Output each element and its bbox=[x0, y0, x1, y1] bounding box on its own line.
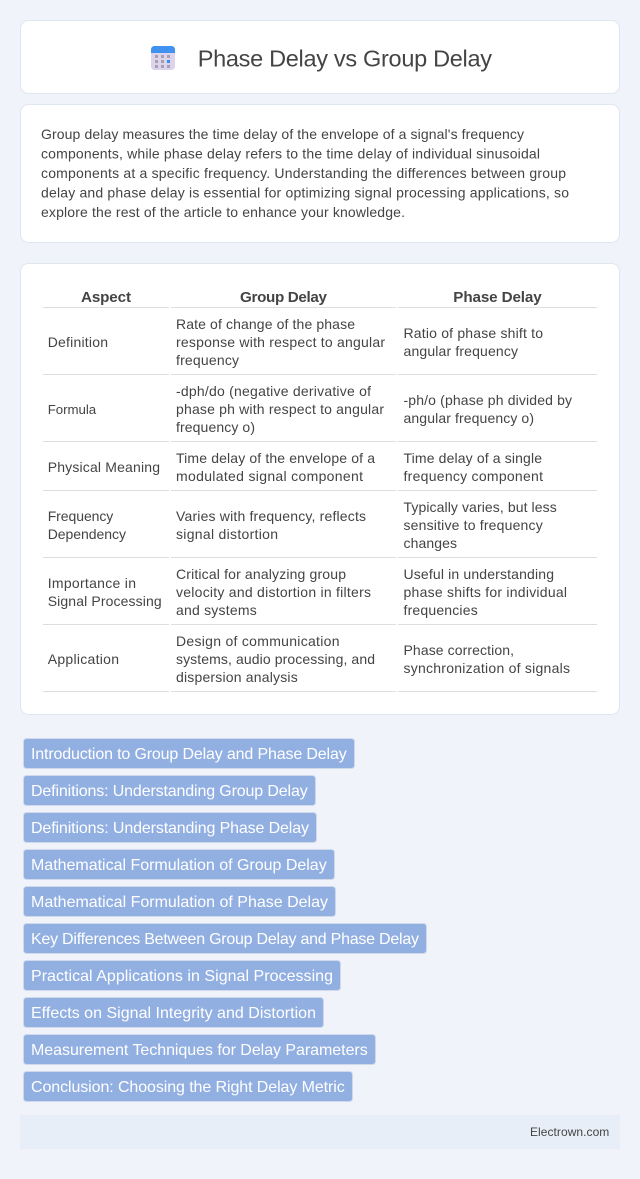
footer bbox=[20, 1115, 620, 1149]
row: importance in signal processing: velocity and distortion in filters bbox=[176, 584, 371, 600]
link: practical applications: Practical Applications in Signal Processing bbox=[31, 968, 333, 985]
intro paragraph: explore the rest of the article to enhance your knowledge. bbox=[41, 204, 405, 220]
link: measurement techniques: Measurement Techniques for Delay Parameters bbox=[31, 1042, 368, 1059]
link: key differences: Key Differences Between Group Delay and Phase Delay bbox=[31, 931, 419, 948]
intro paragraph: components, while phase delay refers to the time delay of individual sinusoidal bbox=[41, 146, 540, 162]
row: definition: Rate of change of the phase bbox=[176, 316, 355, 332]
link: effects: Effects on Signal Integrity and Distortion bbox=[31, 1005, 316, 1022]
row: formula: -ph/o (phase ph divided by bbox=[404, 392, 572, 408]
intro paragraph: delay and phase delay is essential for optimizing signal processing applications, so bbox=[41, 184, 569, 200]
row: application: Phase correction, bbox=[404, 642, 514, 658]
row: frequency dependency: signal distortion bbox=[176, 526, 278, 542]
row: frequency dependency: Dependency bbox=[48, 526, 126, 542]
row: frequency dependency: Varies with frequency, reflects bbox=[176, 508, 366, 524]
link: definitions group delay bbox=[24, 776, 316, 806]
row: frequency dependency: Frequency bbox=[48, 508, 113, 524]
link: conclusion bbox=[24, 1072, 352, 1102]
row: importance in signal processing: Importance in bbox=[48, 575, 136, 591]
row: physical meaning: Time delay of a single bbox=[404, 450, 542, 466]
link: effects bbox=[24, 998, 324, 1028]
row: importance in signal processing: Critical for analyzing group bbox=[176, 566, 346, 582]
row: importance in signal processing bbox=[48, 566, 567, 618]
link: definitions phase delay: Definitions: Understanding Phase Delay bbox=[31, 820, 309, 837]
row: importance in signal processing: frequencies bbox=[404, 602, 478, 618]
row: application: Application bbox=[48, 651, 119, 667]
row: frequency dependency: sensitive to frequency bbox=[404, 517, 543, 533]
panel: introduction bbox=[20, 104, 620, 242]
row: definition: angular frequency bbox=[404, 343, 518, 359]
link: key differences bbox=[24, 924, 426, 954]
row: application bbox=[48, 633, 570, 685]
link: formulation phase delay bbox=[24, 886, 336, 916]
row: physical meaning: Physical Meaning bbox=[48, 459, 160, 475]
link: measurement techniques bbox=[24, 1034, 376, 1064]
row: application: synchronization of signals bbox=[404, 660, 570, 676]
link: formulation group delay: Mathematical Formulation of Group Delay bbox=[31, 857, 327, 874]
row: importance in signal processing: and systems bbox=[176, 602, 257, 618]
table header bbox=[81, 289, 542, 306]
row: application: Design of communication bbox=[176, 633, 340, 649]
row: frequency dependency bbox=[48, 499, 557, 551]
icon: calendar bbox=[151, 46, 175, 70]
intro paragraph: components at a specific frequency. Understanding the differences between group bbox=[41, 165, 566, 181]
row: application: systems, audio processing, and bbox=[176, 651, 375, 667]
panel: comparison table bbox=[20, 264, 620, 714]
link: conclusion: Conclusion: Choosing the Right Delay Metric bbox=[31, 1079, 345, 1096]
intro paragraph: Group delay measures the time delay of the envelope of a signal's frequency bbox=[41, 126, 524, 142]
row: physical meaning: Time delay of the envelope of a bbox=[176, 450, 375, 466]
row: application: dispersion analysis bbox=[176, 669, 298, 685]
row: formula: -dph/do (negative derivative of bbox=[176, 383, 371, 399]
link: introduction: Introduction to Group Delay and Phase Delay bbox=[31, 746, 347, 763]
row: formula: phase ph with respect to angular bbox=[176, 401, 384, 417]
intro paragraph bbox=[41, 126, 569, 220]
row: physical meaning: modulated signal component bbox=[176, 468, 363, 484]
row: physical meaning: frequency component bbox=[404, 468, 543, 484]
row: definition bbox=[48, 316, 543, 368]
row: formula bbox=[48, 383, 572, 435]
title card bbox=[20, 20, 620, 94]
row: importance in signal processing: phase shifts for individual bbox=[404, 584, 567, 600]
table of contents bbox=[24, 738, 426, 1102]
link: practical applications bbox=[24, 960, 340, 990]
row: definition: Ratio of phase shift to bbox=[404, 325, 543, 341]
row: importance in signal processing: Useful in understanding bbox=[404, 566, 554, 582]
heading: Phase Delay vs Group Delay bbox=[198, 46, 492, 72]
row: frequency dependency: changes bbox=[404, 535, 457, 551]
link: introduction bbox=[24, 738, 354, 768]
row: definition: Definition bbox=[48, 334, 108, 350]
row: importance in signal processing: Signal Processing bbox=[48, 593, 162, 609]
footer: Electrown.com bbox=[530, 1125, 609, 1139]
row: definition: frequency bbox=[176, 352, 239, 368]
table header: Group Delay bbox=[240, 289, 328, 306]
row: formula: frequency o) bbox=[176, 419, 255, 435]
link: formulation phase delay: Mathematical Formulation of Phase Delay bbox=[31, 894, 328, 911]
row: definition: response with respect to angular bbox=[176, 334, 385, 350]
table header: Aspect bbox=[81, 289, 131, 306]
row: frequency dependency: Typically varies, but less bbox=[404, 499, 557, 515]
row: formula: Formula bbox=[48, 402, 97, 417]
row: physical meaning bbox=[48, 450, 543, 484]
row: formula: angular frequency o) bbox=[404, 410, 534, 426]
link: definitions phase delay bbox=[24, 812, 316, 842]
link: definitions group delay: Definitions: Understanding Group Delay bbox=[31, 783, 308, 800]
table header: Phase Delay bbox=[453, 289, 542, 306]
link: formulation group delay bbox=[24, 850, 334, 880]
